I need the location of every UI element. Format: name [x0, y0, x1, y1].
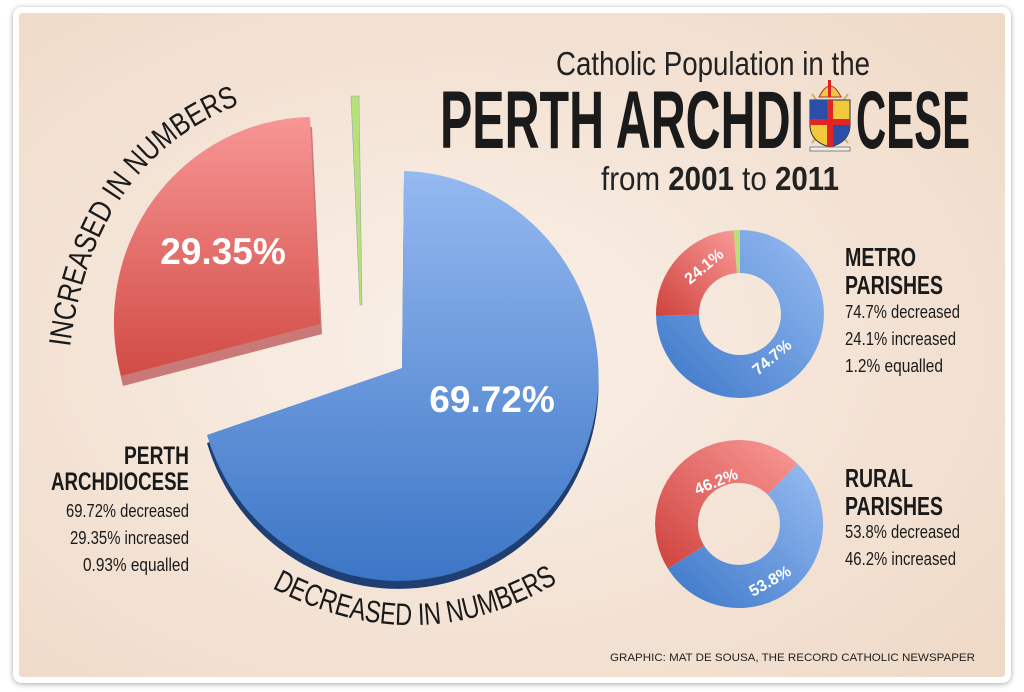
donut chart: metro parishes: 74.7% — [750, 337, 795, 379]
text block: Perth Archdiocese: 69.72% decreased — [66, 501, 189, 521]
text block: Perth Archdiocese: 29.35% increased — [70, 528, 189, 548]
text block: Perth Archdiocese: PERTH — [124, 442, 189, 470]
donut chart: metro parishes: 24.1% — [682, 246, 727, 288]
text block: metro parishes: PARISHES — [845, 270, 943, 300]
title: Catholic Population in the — [556, 45, 870, 82]
curved label: decreased in numbers: DECREASED IN NUMBERS — [274, 566, 555, 625]
icon: archdiocese crest — [810, 80, 850, 151]
text block: Perth Archdiocese: 0.93% equalled — [83, 555, 189, 575]
pie chart: Perth Archdiocese — [114, 96, 599, 589]
title: from 2001 to 2011 — [601, 160, 839, 197]
curved label: increased in numbers: INCREASED IN NUMBERS — [49, 86, 236, 345]
donut chart: rural parishes — [655, 440, 823, 608]
text block: rural parishes: RURAL — [845, 463, 913, 493]
pie slice: decreased 69.72% — [207, 171, 599, 589]
pie slice: increased 29.35%: 29.35% — [160, 231, 286, 272]
text block: metro parishes: 24.1% increased — [845, 329, 956, 349]
donut chart: rural parishes: 53.8% — [746, 563, 794, 600]
donut chart: metro parishes — [656, 230, 824, 398]
text block: Perth Archdiocese: ARCHDIOCESE — [51, 468, 189, 496]
text block: metro parishes — [845, 242, 960, 376]
text block: rural parishes: 46.2% increased — [845, 549, 956, 569]
text block: Perth Archdiocese — [51, 442, 189, 575]
donut chart: rural parishes: 46.2% — [692, 466, 741, 499]
pie slice: increased 29.35% — [114, 117, 322, 386]
text block: metro parishes: 1.2% equalled — [845, 356, 943, 376]
text block: rural parishes — [845, 463, 960, 569]
text block: rural parishes: 53.8% decreased — [845, 522, 960, 542]
text block: metro parishes: METRO — [845, 242, 916, 272]
pie slice: decreased 69.72%: 69.72% — [429, 379, 555, 420]
pie slice: equalled 0.93% — [351, 96, 362, 305]
text block: metro parishes: 74.7% decreased — [845, 302, 960, 322]
title — [440, 45, 970, 197]
text block: rural parishes: PARISHES — [845, 491, 943, 521]
credit: GRAPHIC: MAT DE SOUSA, THE RECORD CATHOLIC NEWSPAPER — [610, 652, 975, 664]
